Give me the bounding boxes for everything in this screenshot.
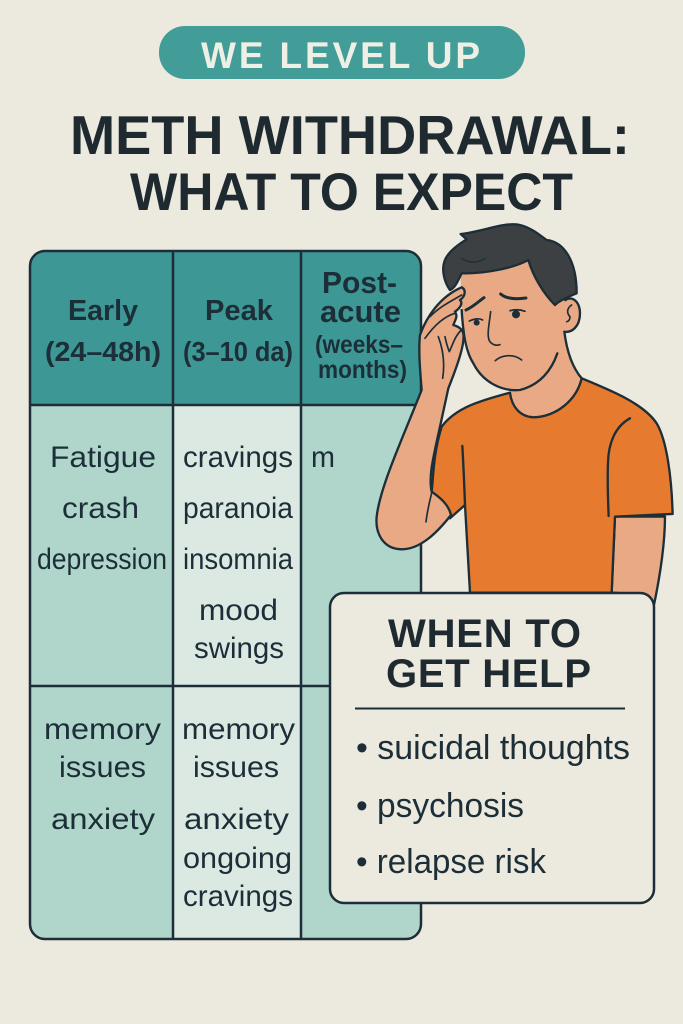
neck [510,330,582,417]
peak symptoms, row 2: anxiety [184,803,289,836]
hair [443,224,577,305]
brand pill: WE LEVEL UP: WE LEVEL UP [201,35,480,76]
column header: Post-acute: months) [318,356,407,384]
ear [562,299,580,332]
title: WHAT TO EXPECT [130,163,573,222]
column header: Peak: (3–10 da) [183,336,293,367]
frown [495,356,522,361]
column header: Post-acute: (weeks– [315,331,403,359]
early symptoms, row 1: depression [37,543,167,576]
panel heading: GET HELP [386,652,591,696]
orange t-shirt [432,378,673,593]
peak symptoms, row 1: mood [199,594,278,627]
early symptoms, row 2 [44,713,161,836]
warning signs list [356,729,630,881]
early symptoms, row 2: anxiety [51,803,155,836]
nose [488,312,500,345]
brand pill: WE LEVEL UP [159,26,525,79]
column header: Post-acute [315,265,407,384]
peak symptoms, row 2: memory [182,713,295,746]
title [70,104,630,222]
peak symptoms, row 2: issues [193,751,279,784]
ear detail [567,305,572,322]
panel heading [386,612,591,696]
column header: Peak [183,295,293,367]
panel heading: WHEN TO [388,612,581,656]
sleeve seam [462,418,630,516]
column header: Post-acute: Post- [322,265,397,300]
column header: Early: (24–48h) [45,336,161,367]
peak symptoms, row 1: swings [194,632,284,665]
column header: Early [45,295,161,367]
column header: Post-acute: acute [320,294,401,329]
eyes [469,310,525,321]
peak symptoms, row 1: cravings [183,441,293,474]
warning signs list: • relapse risk [356,843,547,881]
early symptoms, row 1: Fatigue [50,441,156,474]
jaw line [462,310,582,390]
early symptoms, row 1: crash [62,492,139,525]
panel: withdrawal timeline table [30,251,421,939]
panel: when to get help [330,593,654,903]
peak symptoms, row 1 [183,441,293,665]
finger lines [425,295,463,522]
column header: Early: Early [68,295,138,327]
peak symptoms, row 1: paranoia [183,492,293,525]
peak symptoms, row 2: cravings [183,880,293,913]
right arm [612,517,665,608]
column header: Peak: Peak [205,295,274,327]
warning signs list: • psychosis [356,787,524,825]
illustration: stressed man holding his head [376,224,673,608]
eyebrows [466,294,526,310]
early symptoms, row 1 [37,441,167,576]
post-acute symptom fragment: m [311,441,335,474]
early symptoms, row 2: memory [44,713,161,746]
face [461,260,567,389]
peak symptoms, row 2 [182,713,295,913]
title: METH WITHDRAWAL: [70,104,630,166]
peak symptoms, row 2: ongoing [183,842,292,875]
raised arm and hand [376,287,465,549]
peak symptoms, row 1: insomnia [183,543,293,576]
warning signs list: • suicidal thoughts [356,729,630,767]
early symptoms, row 2: issues [59,751,146,784]
